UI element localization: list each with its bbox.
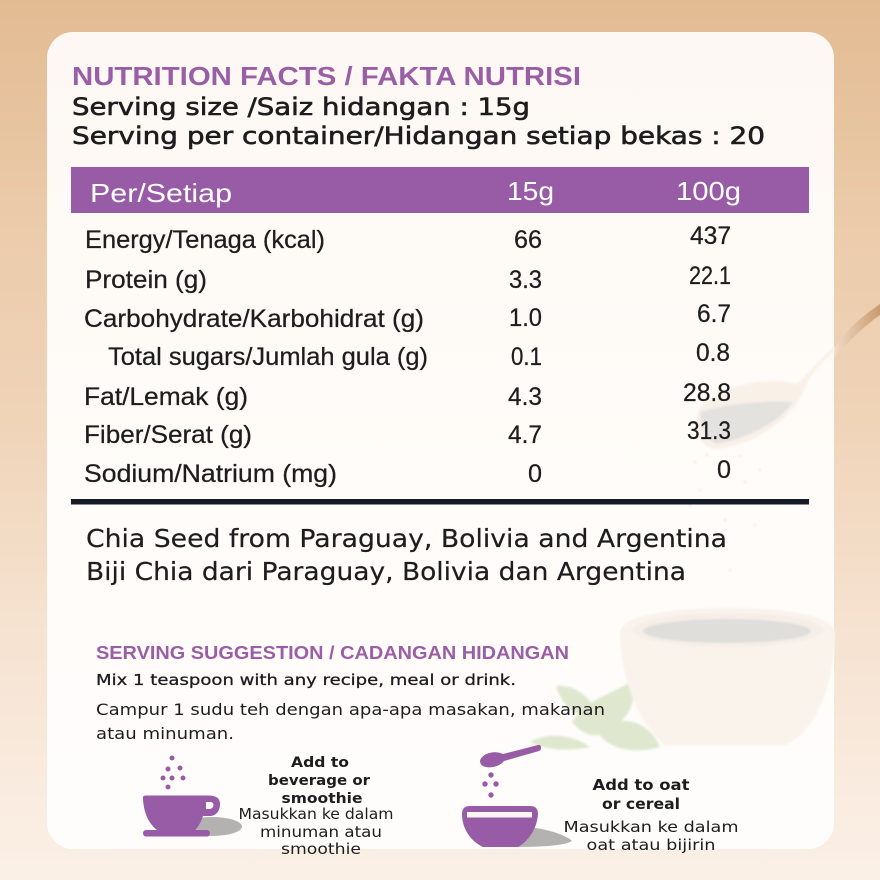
table header	[71, 167, 809, 213]
row: sodium: 0	[717, 456, 731, 484]
row: protein	[85, 262, 731, 294]
table rows	[84, 222, 731, 488]
table header: 15g	[507, 176, 554, 206]
label: oat or cereal	[564, 776, 738, 854]
row: total sugars: 0.8	[696, 339, 730, 367]
label: beverage: Masukkan ke dalam	[238, 805, 394, 823]
label: beverage: beverage or	[268, 773, 371, 789]
row: total sugars	[108, 339, 730, 371]
heading	[72, 61, 765, 150]
row: protein: 22.1	[689, 262, 731, 290]
photo: mint leaves	[530, 678, 660, 750]
photo: spoon with seeds	[689, 346, 834, 571]
label: beverage	[238, 755, 394, 858]
label: oat or cereal: Add to oat	[592, 776, 690, 794]
row: sodium	[84, 456, 731, 488]
servings per container: Serving per container/Hidangan setiap bekas : 20	[72, 122, 765, 150]
row: sodium: Sodium/Natrium (mg)	[84, 460, 337, 488]
row: energy: 66	[514, 226, 542, 254]
serving size: Serving size /Saiz hidangan : 15g	[72, 93, 530, 121]
row: carbohydrate: Carbohydrate/Karbohidrat (g)	[84, 305, 424, 333]
row: fat: 28.8	[683, 379, 731, 407]
origin text: Biji Chia dari Paraguay, Bolivia dan Argentina	[86, 557, 686, 586]
origin text	[86, 524, 727, 586]
icon: bowl and spoon	[462, 745, 572, 847]
row: total sugars: 0.1	[511, 343, 542, 371]
row: protein: 3.3	[509, 266, 542, 294]
row: protein: Protein (g)	[85, 266, 207, 294]
photo: bowl of seeds	[620, 608, 835, 745]
icon: cup	[143, 756, 242, 836]
label: oat or cereal: Masukkan ke dalam	[564, 818, 738, 836]
English instruction: Mix 1 teaspoon with any recipe, meal or drink.	[96, 671, 516, 689]
row: fiber: 31.3	[687, 417, 731, 445]
label: beverage: Add to	[291, 755, 349, 771]
row: energy	[85, 222, 731, 254]
row: fat	[84, 379, 731, 411]
row: carbohydrate: 1.0	[509, 304, 542, 332]
serving suggestion: atau minuman.	[96, 724, 234, 743]
row: carbohydrate	[84, 300, 731, 333]
origin text: Chia Seed from Paraguay, Bolivia and Argentina	[86, 524, 727, 553]
table rule	[71, 499, 809, 504]
row: energy: Energy/Tenaga (kcal)	[85, 226, 325, 254]
spoon handle outside panel	[834, 304, 880, 358]
table header: Per/Setiap	[90, 178, 232, 208]
table header: 100g	[676, 176, 741, 206]
label: beverage: smoothie	[281, 840, 361, 858]
subheading: SERVING SUGGESTION / CADANGAN HIDANGAN	[96, 643, 569, 663]
row: fat: 4.3	[508, 383, 542, 411]
row: energy: 437	[690, 222, 731, 250]
serving suggestion	[96, 643, 605, 743]
row: sodium: 0	[528, 460, 542, 488]
row: fiber: 4.7	[508, 421, 542, 449]
title: NUTRITION FACTS / FAKTA NUTRISI	[72, 61, 581, 91]
label: beverage: smoothie	[282, 791, 363, 807]
row: fiber	[84, 417, 731, 449]
row: total sugars: Total sugars/Jumlah gula (g)	[108, 343, 428, 371]
Malay instruction: Campur 1 sudu teh dengan apa-apa masakan, makanan	[96, 700, 605, 719]
label: beverage: minuman atau	[260, 823, 382, 841]
label: oat or cereal: or cereal	[602, 795, 680, 813]
row: carbohydrate: 6.7	[697, 300, 731, 328]
row: fat: Fat/Lemak (g)	[84, 383, 248, 411]
row: fiber: Fiber/Serat (g)	[84, 421, 252, 449]
label: oat or cereal: oat atau bijirin	[586, 836, 716, 854]
